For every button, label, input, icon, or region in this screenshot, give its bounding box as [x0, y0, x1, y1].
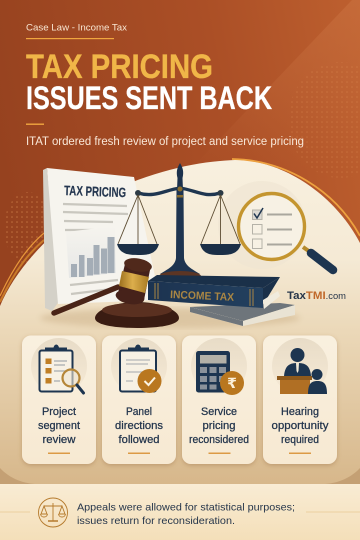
icon: clipboard with check badge: [120, 344, 162, 393]
eyebrow: Case Law - Income Tax: [26, 22, 127, 39]
icon: person at podium with attendee: [277, 348, 327, 394]
card label: Service: [201, 406, 237, 418]
illustration: balance scale: [117, 163, 241, 281]
cream curved panel: [0, 159, 360, 490]
icon: calculator with rupee coin: ₹: [227, 376, 237, 392]
card label: Hearing: [281, 406, 319, 418]
book title: INCOME TAX: [170, 289, 235, 304]
card label: segment: [38, 420, 80, 432]
card label: followed: [118, 434, 160, 446]
footer text: [77, 502, 295, 527]
brand: TaxTMI.com: TaxTMI.com: [287, 290, 346, 302]
card label: directions: [115, 420, 164, 432]
illustration: floor shadow: [40, 308, 300, 328]
illustration: document with chart: [43, 168, 160, 311]
card: hearing opportunity required: [263, 336, 337, 464]
card label: pricing: [202, 420, 236, 432]
footer text: issues return for reconsideration.: [77, 515, 235, 527]
footer strip: [0, 468, 360, 540]
card label: required: [281, 434, 319, 446]
card label: opportunity: [272, 420, 329, 432]
title: ISSUES SENT BACK: [26, 80, 272, 116]
document heading: TAX PRICING: [64, 183, 126, 200]
card label: [189, 406, 249, 446]
card: service pricing reconsidered: [182, 336, 256, 464]
illustration: gavel: [54, 256, 179, 328]
eyebrow: Case Law - Income Tax: Case Law - Income Tax: [26, 22, 127, 34]
illustration: income tax books: [148, 275, 295, 326]
icon: scale badge: [38, 498, 68, 527]
card label: reconsidered: [189, 434, 249, 446]
card label: [38, 406, 80, 446]
subtitle: ITAT ordered fresh review of project and service pricing: [26, 136, 304, 148]
card: project segment review: [22, 336, 96, 464]
icon: clipboard with magnifier: [40, 344, 84, 393]
card label: review: [42, 434, 76, 446]
footer text: Appeals were allowed for statistical purposes;: [77, 502, 295, 514]
card label: Project: [42, 406, 76, 418]
card label: [272, 406, 329, 446]
title: TAX PRICING: [26, 48, 213, 86]
title: [26, 48, 272, 116]
document text lines: [63, 204, 128, 294]
card label: Panel: [126, 406, 152, 418]
illustration: magnifying glass over checklist: [238, 194, 333, 270]
card: panel directions followed: [102, 336, 176, 464]
document bar chart: [66, 226, 116, 278]
card label: [115, 406, 164, 446]
